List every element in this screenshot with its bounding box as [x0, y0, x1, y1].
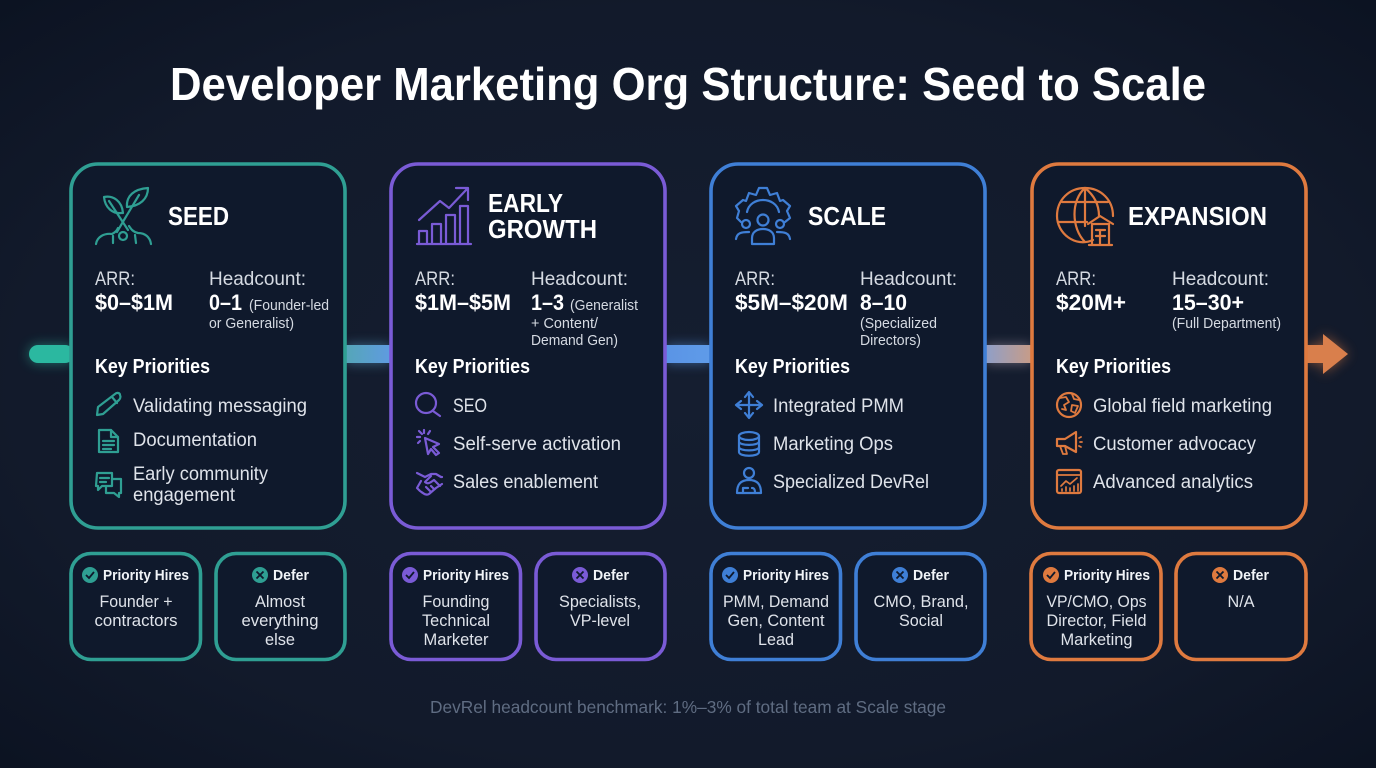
priority: SEO: [416, 393, 487, 417]
stage name: [488, 188, 597, 244]
panel: early growth priority hires: Founding: [422, 592, 490, 611]
panel: early growth defer: [536, 554, 665, 660]
panel: seed defer: Almost: [255, 592, 305, 611]
panel: seed defer: everything: [242, 611, 318, 630]
panel: early growth defer: VP-level: [570, 611, 630, 630]
title: Developer Marketing Org Structure: Seed to Scale: [170, 58, 1206, 110]
headcount: (Specialized: [860, 316, 937, 332]
panel: early growth defer: Defer: [593, 568, 629, 584]
headcount: Headcount:: [209, 268, 306, 290]
priority: specialized devrel: Specialized DevRel: [773, 472, 929, 493]
priority: sales enablement: Sales enablement: [453, 472, 599, 493]
panel: scale priority hires: Priority Hires: [743, 568, 829, 584]
priority: marketing ops: [739, 432, 893, 456]
priority: early community engagement: [96, 464, 268, 506]
headcount: 0–1: [209, 290, 242, 315]
ARR: [415, 268, 511, 315]
icon: check badge: [402, 567, 418, 583]
icon: x badge: [252, 567, 268, 583]
panel: expansion defer: N/A: [1228, 592, 1255, 611]
panel: seed: [71, 164, 345, 528]
headcount: Headcount:: [860, 268, 957, 290]
headcount: [531, 268, 638, 349]
panel: scale: [711, 164, 985, 528]
panel: expansion defer: [1176, 554, 1306, 660]
priority: specialized devrel: [737, 468, 929, 493]
panel: scale defer: CMO, Brand,: [874, 592, 968, 611]
panel: expansion priority hires: [1031, 554, 1161, 660]
panel: expansion: [1032, 164, 1306, 528]
panel: scale defer: Social: [899, 611, 943, 630]
ARR: ARR:: [95, 268, 135, 290]
icon: check badge: [722, 567, 738, 583]
icon: sprout with roots: [96, 188, 151, 244]
headcount: (Founder-led: [249, 298, 329, 314]
headcount: Headcount:: [1172, 268, 1269, 290]
priority: early community engagement: Early community: [133, 464, 268, 485]
timeline connector arrow: [29, 334, 1348, 374]
icon: x badge: [572, 567, 588, 583]
priority: early community engagement: engagement: [133, 485, 236, 506]
headcount: Directors): [860, 333, 921, 349]
priority: self-serve activation: Self-serve activation: [453, 434, 621, 455]
headcount: Demand Gen): [531, 333, 618, 349]
icon: growth chart: [417, 188, 471, 244]
priority: integrated PMM: [736, 392, 904, 418]
panel: scale priority hires: [711, 554, 840, 660]
panel: early growth priority hires: Marketer: [424, 630, 489, 649]
panel: seed priority hires: [71, 554, 200, 660]
panel: seed priority hires: Founder +: [100, 592, 173, 611]
priority: global field marketing: Global field marketing: [1093, 396, 1272, 417]
panel: scale priority hires: Lead: [758, 630, 794, 649]
panel: early growth priority hires: Technical: [422, 611, 490, 630]
panel: early growth priority hires: Priority Hires: [423, 568, 509, 584]
icon: globe with building: [1057, 188, 1113, 245]
priority: advanced analytics: Advanced analytics: [1093, 472, 1253, 493]
ARR: [735, 268, 848, 315]
priority: documentation: Documentation: [133, 430, 257, 451]
key priorities heading: Key Priorities: [1056, 356, 1171, 378]
panel: seed defer: else: [265, 630, 295, 649]
panel: scale defer: [856, 554, 985, 660]
priority: validating messaging: Validating messaging: [133, 396, 307, 417]
priority: integrated PMM: Integrated PMM: [773, 396, 904, 417]
stage name: EXPANSION: [1128, 201, 1267, 231]
icon: gear with team: [736, 188, 790, 244]
priority: customer advocacy: Customer advocacy: [1093, 434, 1256, 455]
panel: early growth priority hires: [391, 554, 520, 660]
panel: scale defer: Defer: [913, 568, 949, 584]
ARR: $20M+: [1056, 290, 1126, 315]
ARR: ARR:: [415, 268, 455, 290]
stage name: SEED: [168, 201, 229, 231]
priority: self-serve activation: [417, 430, 621, 455]
panel: early growth defer: Specialists,: [559, 592, 641, 611]
panel: seed defer: [216, 554, 345, 660]
stage name: SCALE: [808, 201, 886, 231]
panel: expansion priority hires: Director, Field: [1046, 611, 1146, 630]
key priorities heading: Key Priorities: [415, 356, 530, 378]
panel: seed defer: Defer: [273, 568, 309, 584]
headcount: 15–30+: [1172, 290, 1244, 315]
priority: marketing ops: Marketing Ops: [773, 434, 893, 455]
panel: seed priority hires: contractors: [94, 611, 178, 630]
ARR: [1056, 268, 1126, 315]
ARR: $1M–$5M: [415, 290, 511, 315]
icon: x badge: [1212, 567, 1228, 583]
ARR: [95, 268, 173, 315]
key priorities heading: Key Priorities: [735, 356, 850, 378]
icon: x badge: [892, 567, 908, 583]
priority: SEO: SEO: [453, 396, 487, 417]
headcount: 8–10: [860, 290, 907, 315]
headcount: (Full Department): [1172, 316, 1281, 332]
headcount: 1–3: [531, 290, 564, 315]
headcount: [860, 268, 957, 349]
footnote: DevRel headcount benchmark: 1%–3% of total team at Scale stage: [430, 697, 946, 717]
stage name: GROWTH: [488, 214, 597, 244]
icon: check badge: [82, 567, 98, 583]
headcount: or Generalist): [209, 316, 294, 332]
panel: expansion priority hires: Marketing: [1060, 630, 1132, 649]
panel: expansion priority hires: Priority Hires: [1064, 568, 1150, 584]
headcount: + Content/: [531, 316, 599, 332]
ARR: ARR:: [1056, 268, 1096, 290]
panel: seed priority hires: Priority Hires: [103, 568, 189, 584]
headcount: [209, 268, 329, 332]
panel: scale priority hires: Gen, Content: [728, 611, 825, 630]
key priorities heading: Key Priorities: [95, 356, 210, 378]
panel: expansion priority hires: VP/CMO, Ops: [1046, 592, 1146, 611]
headcount: Headcount:: [531, 268, 628, 290]
panel: early growth: [391, 164, 665, 528]
ARR: ARR:: [735, 268, 775, 290]
icon: check badge: [1043, 567, 1059, 583]
ARR: $5M–$20M: [735, 290, 848, 315]
stage name: EARLY: [488, 188, 563, 218]
headcount: [1172, 268, 1281, 332]
headcount: (Generalist: [570, 298, 638, 314]
ARR: $0–$1M: [95, 290, 173, 315]
panel: expansion defer: Defer: [1233, 568, 1269, 584]
panel: scale priority hires: PMM, Demand: [723, 592, 829, 611]
